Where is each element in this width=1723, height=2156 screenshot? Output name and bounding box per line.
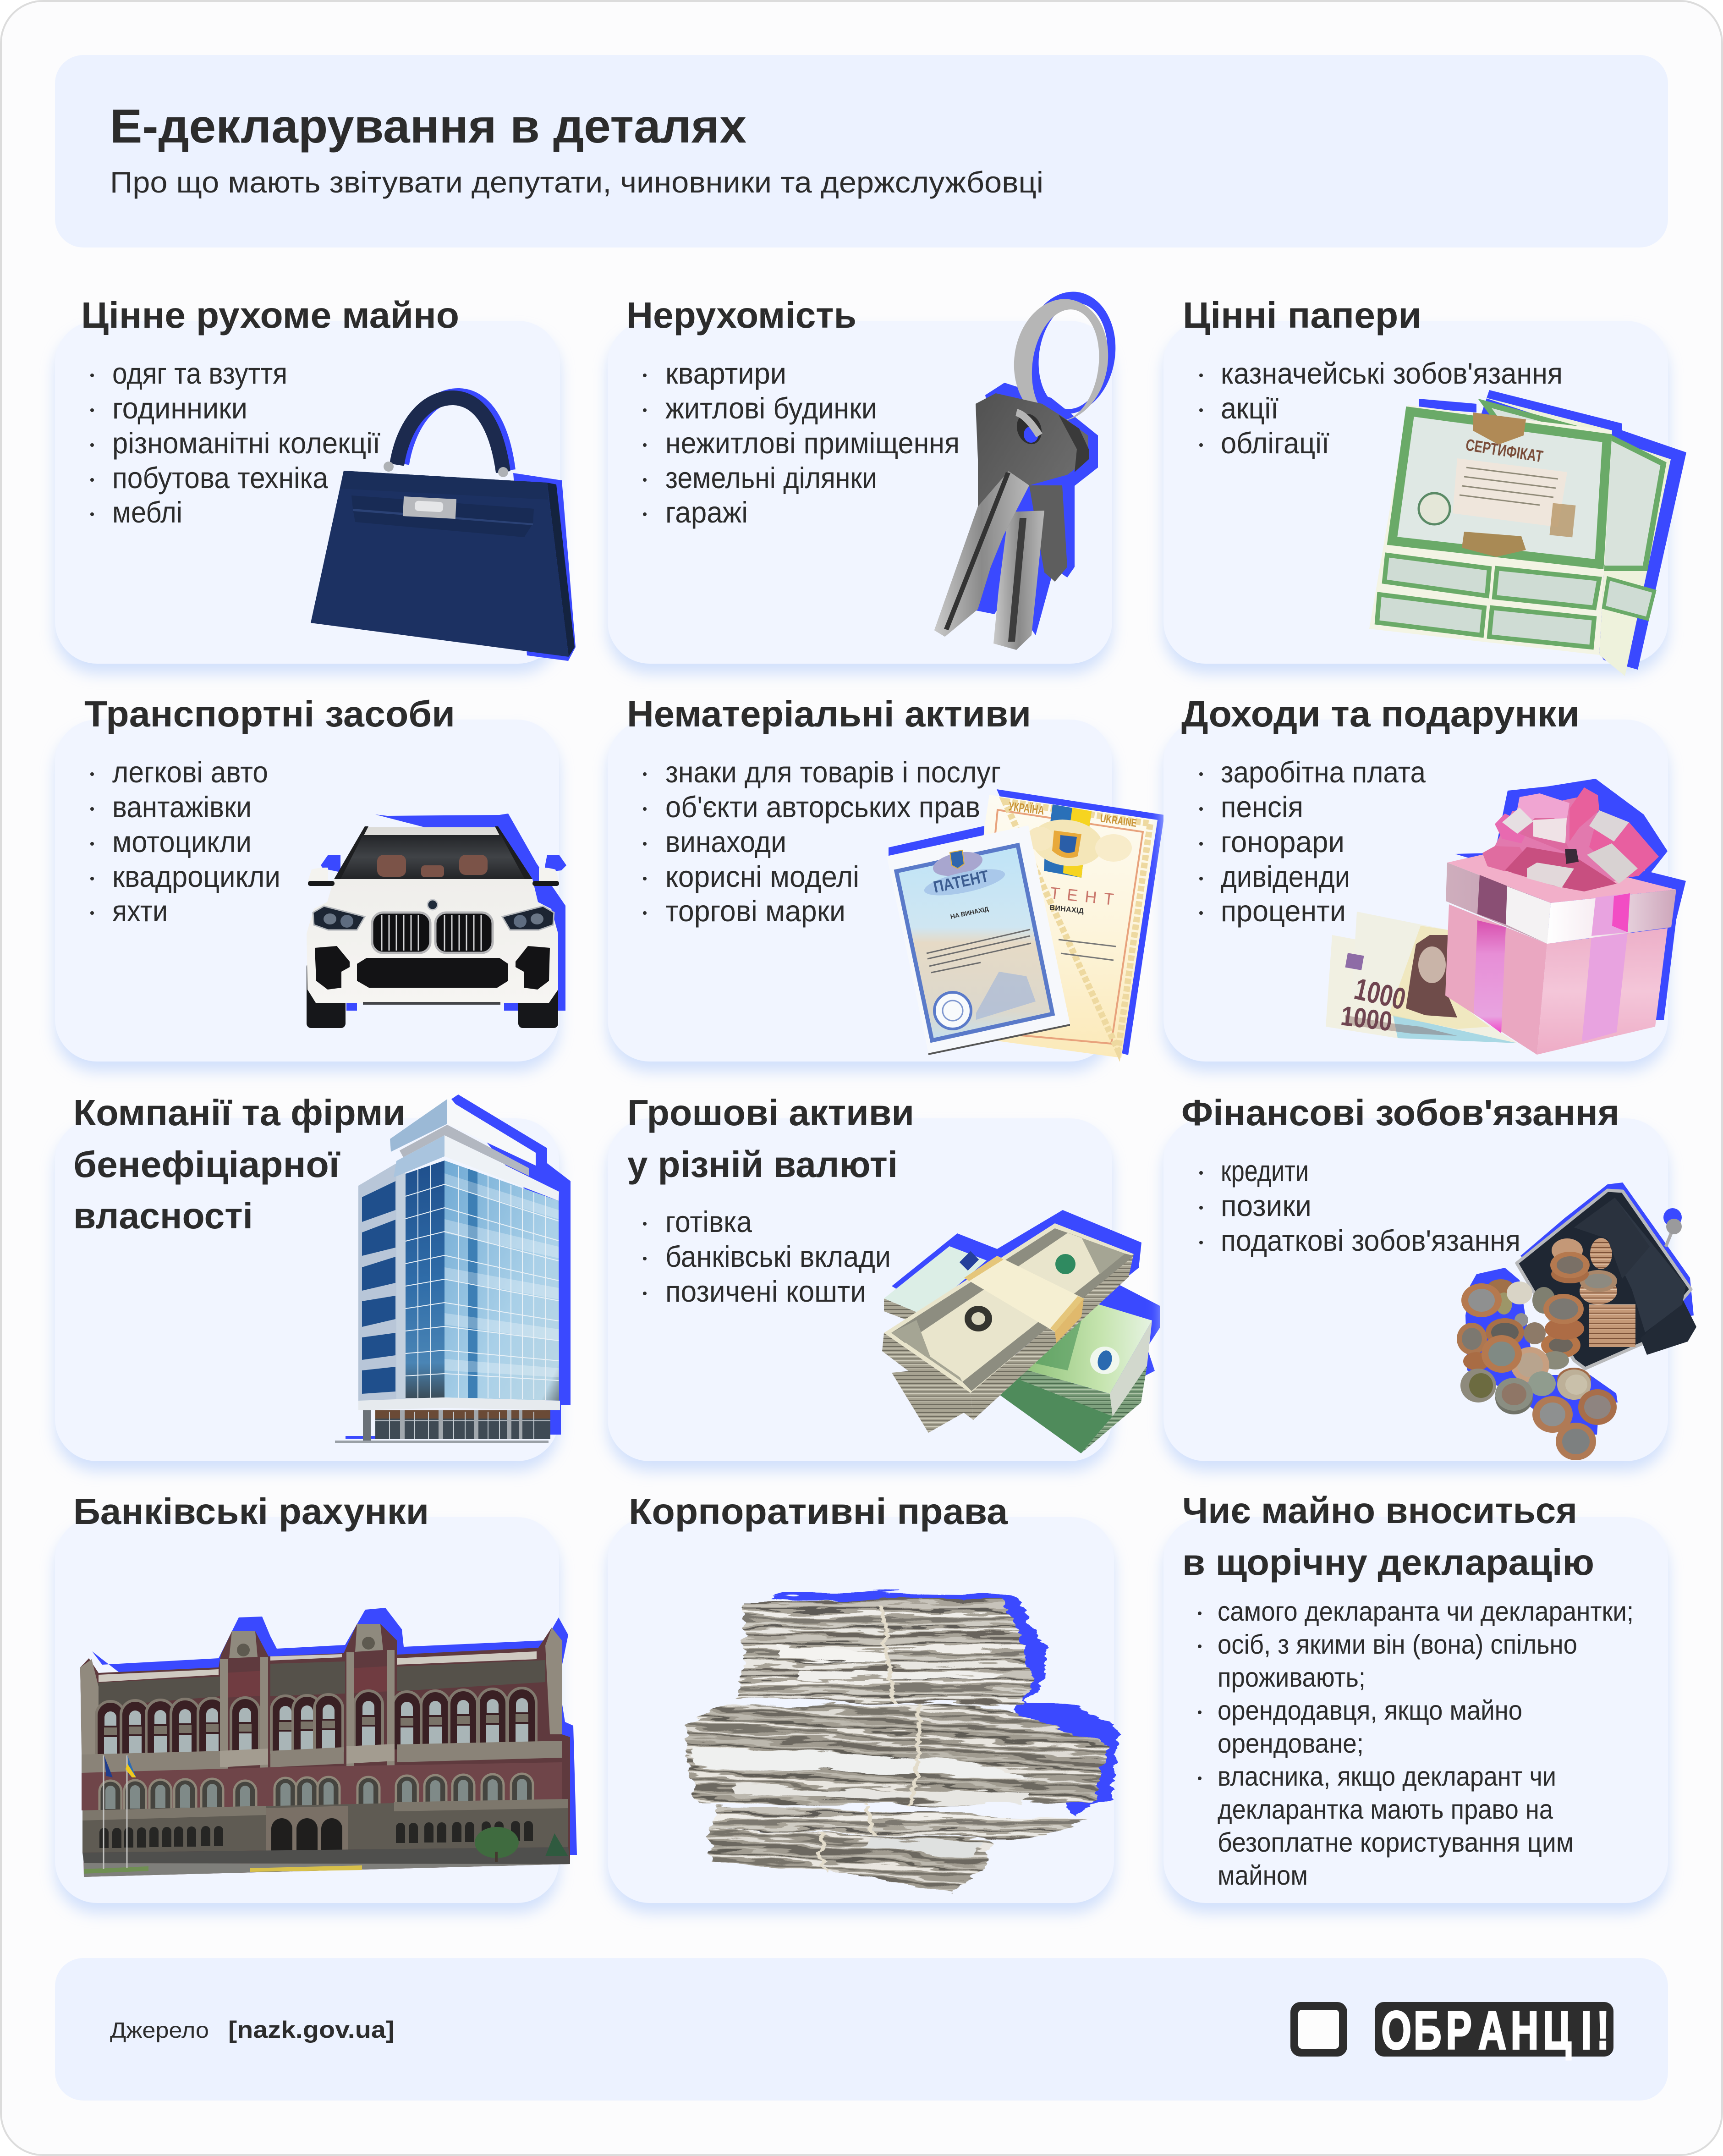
panel: vehicles bbox=[55, 693, 566, 1062]
source link: [nazk.gov.ua] bbox=[228, 2017, 395, 2043]
list: земельні ділянки bbox=[665, 461, 877, 495]
icon: purse with coins bbox=[1457, 1182, 1696, 1460]
list: проценти bbox=[1221, 894, 1346, 928]
panel: movable property bbox=[55, 295, 576, 664]
heading: власності bbox=[73, 1195, 253, 1236]
list: гонорари bbox=[1221, 825, 1344, 858]
heading: Цінне рухоме майно bbox=[81, 295, 459, 336]
list: податкові зобов'язання bbox=[1221, 1224, 1520, 1257]
logo mark bbox=[1290, 2002, 1347, 2057]
header panel bbox=[55, 55, 1668, 248]
list: кредити bbox=[1221, 1154, 1309, 1188]
panel: companies bbox=[55, 1092, 571, 1461]
icon: patents: ПАТЕНТ bbox=[932, 866, 990, 896]
list: заробітна плата bbox=[1221, 755, 1426, 789]
list: знаки для товарів і послуг bbox=[665, 755, 1001, 789]
icon: gift box and banknotes: 1000 bbox=[1351, 972, 1409, 1016]
icon: keys bbox=[934, 286, 1123, 650]
panel: whose property bbox=[1163, 1490, 1668, 1903]
icon: white SUV bbox=[307, 814, 566, 1028]
panel: money assets bbox=[608, 1092, 1160, 1461]
list: побутова техніка bbox=[112, 461, 329, 495]
heading: Банківські рахунки bbox=[73, 1491, 429, 1532]
heading: бенефіціарної bbox=[73, 1144, 340, 1185]
list: осіб, з якими він (вона) спільно bbox=[1218, 1629, 1577, 1660]
list bbox=[1199, 755, 1426, 928]
icon: office building bbox=[335, 1094, 571, 1443]
list bbox=[1199, 357, 1563, 460]
list: дивіденди bbox=[1221, 860, 1350, 893]
source label: Джерело bbox=[110, 2018, 209, 2043]
list bbox=[643, 1205, 891, 1308]
heading: Нематеріальні активи bbox=[627, 693, 1031, 734]
panel: intangible assets bbox=[608, 693, 1164, 1062]
list: годинники bbox=[112, 391, 247, 425]
list: орендодавця, якщо майно bbox=[1218, 1695, 1522, 1726]
list: легкові авто bbox=[112, 755, 268, 789]
icon: patents: УКРАЇНА bbox=[1008, 799, 1045, 817]
icon: patents: ТЕНТ bbox=[1049, 883, 1115, 909]
list bbox=[90, 755, 280, 928]
list: гаражі bbox=[665, 495, 748, 529]
list: пенсія bbox=[1221, 790, 1303, 824]
heading: Нерухомість bbox=[626, 295, 856, 336]
footer panel bbox=[55, 1958, 1668, 2101]
list: меблі bbox=[112, 495, 182, 529]
list: акції bbox=[1221, 391, 1279, 425]
list bbox=[643, 755, 1001, 928]
list: безоплатне користування цим bbox=[1218, 1827, 1574, 1858]
heading bbox=[1182, 1490, 1594, 1583]
list: яхти bbox=[112, 894, 168, 928]
panel: corporate rights bbox=[608, 1491, 1119, 1903]
heading: Корпоративні права bbox=[629, 1491, 1008, 1532]
icon: patents: UKRAINE bbox=[1099, 812, 1137, 830]
logo wordmark: ОБРАНЦІ! bbox=[1381, 2000, 1609, 2060]
heading: в щорічну декларацію bbox=[1182, 1542, 1594, 1583]
list: різноманітні колекції bbox=[112, 426, 380, 460]
icon: gift box and banknotes: 1000 bbox=[1339, 1000, 1394, 1037]
list: одяг та взуття bbox=[112, 357, 287, 390]
list: облігації bbox=[1221, 426, 1329, 460]
icon: patents: ВИНАХІД bbox=[1049, 904, 1085, 915]
list: вантажівки bbox=[112, 790, 252, 824]
icon: banknote stacks bbox=[882, 1210, 1160, 1453]
icon: National Bank building bbox=[80, 1608, 577, 1877]
panel: securities bbox=[1163, 295, 1686, 676]
icon: treasury certificates: СЕРТИФІКАТ bbox=[1465, 435, 1544, 466]
heading: Фінансові зобов'язання bbox=[1181, 1092, 1619, 1133]
heading: Грошові активи bbox=[627, 1092, 914, 1133]
list bbox=[90, 357, 380, 529]
list: позики bbox=[1221, 1189, 1311, 1222]
panel: income and gifts bbox=[1163, 693, 1686, 1062]
list: самого декларанта чи декларантки; bbox=[1218, 1596, 1634, 1627]
icon: patents bbox=[887, 789, 1164, 1058]
heading: у різній валюті bbox=[627, 1144, 898, 1185]
list: нежитлові приміщення bbox=[665, 426, 960, 460]
list: об'єкти авторських прав bbox=[665, 790, 980, 824]
heading bbox=[73, 1092, 406, 1236]
list: мотоцикли bbox=[112, 825, 252, 858]
icon: paper stack bbox=[684, 1591, 1119, 1892]
heading: Доходи та подарунки bbox=[1181, 693, 1580, 734]
icon: gift box and banknotes bbox=[1326, 779, 1686, 1055]
heading: Цінні папери bbox=[1183, 295, 1421, 336]
list: корисні моделі bbox=[665, 860, 859, 893]
title: Е-декларування в деталях bbox=[110, 100, 746, 153]
panel: bank accounts bbox=[55, 1491, 577, 1903]
list bbox=[1199, 1154, 1520, 1257]
list: банківські вклади bbox=[665, 1240, 891, 1273]
heading: Чиє майно вноситься bbox=[1182, 1490, 1577, 1531]
list: торгові марки bbox=[665, 894, 845, 928]
icon: handbag bbox=[311, 395, 576, 661]
icon: patents: НА ВИНАХІД bbox=[949, 905, 989, 920]
list: майном bbox=[1218, 1860, 1308, 1891]
list: казначейські зобов'язання bbox=[1221, 357, 1563, 390]
list: проживають; bbox=[1218, 1662, 1366, 1693]
subtitle: Про що мають звітувати депутати, чиновники та держслужбовці bbox=[110, 165, 1043, 199]
list: винаходи bbox=[665, 825, 786, 858]
list bbox=[643, 357, 960, 529]
list: позичені кошти bbox=[665, 1275, 866, 1308]
panel: financial obligations bbox=[1163, 1092, 1696, 1461]
icon: treasury certificates bbox=[1369, 390, 1686, 676]
list: квартири bbox=[665, 357, 786, 390]
list: власника, якщо декларант чи bbox=[1218, 1761, 1556, 1792]
list: житлові будинки bbox=[665, 391, 877, 425]
list: орендоване; bbox=[1218, 1728, 1364, 1759]
list: квадроцикли bbox=[112, 860, 280, 893]
heading: Транспортні засоби bbox=[84, 693, 455, 734]
list: готівка bbox=[665, 1205, 752, 1238]
panel: real estate bbox=[608, 286, 1123, 664]
heading bbox=[627, 1092, 914, 1185]
list bbox=[1198, 1596, 1634, 1891]
list: декларантка мають право на bbox=[1218, 1794, 1553, 1825]
heading: Компанії та фірми bbox=[73, 1092, 406, 1133]
